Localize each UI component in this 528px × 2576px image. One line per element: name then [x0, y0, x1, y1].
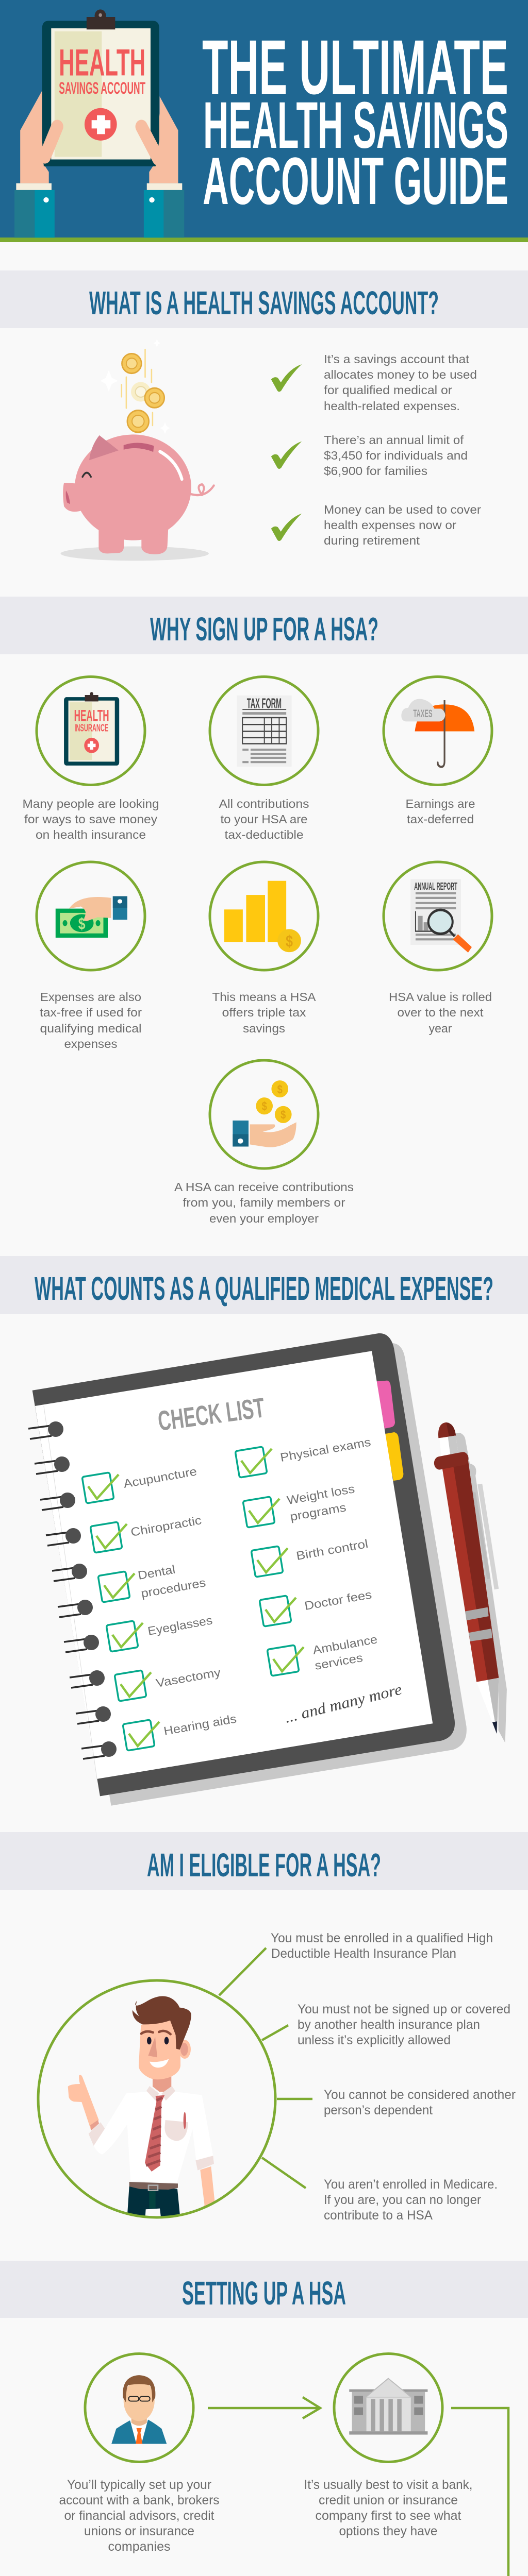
text blocks: eligibility rules: unless it’s explicitly allowed — [298, 2033, 451, 2047]
icon: bar stacks with coin — [224, 881, 301, 952]
icon: hand receiving coins: $ — [277, 1083, 283, 1096]
text blocks: benefit captions: to your HSA are — [221, 812, 307, 826]
icon rings — [37, 677, 492, 1168]
text blocks: eligibility rules: person’s dependent — [324, 2103, 433, 2117]
checklist text — [122, 1392, 404, 1738]
text blocks: benefit captions: even your employer — [209, 1212, 319, 1225]
text blocks: benefit captions — [23, 797, 492, 1225]
text blocks: benefit captions: Earnings are — [405, 797, 475, 810]
text block: definition points: health-related expenses. — [324, 399, 460, 413]
section: am I eligible — [0, 1832, 528, 2223]
notebook checklist illustration — [28, 1333, 507, 1806]
text blocks: benefit captions: tax-deductible — [225, 828, 303, 841]
checklist text: services — [314, 1651, 364, 1672]
checklist text: Acupuncture — [122, 1464, 198, 1490]
text block: definition points: allocates money to be used — [324, 368, 477, 381]
checklist text: CHECK LIST — [156, 1392, 267, 1437]
icon: annual report with magnifier — [410, 879, 472, 953]
text block: definition points: It’s a savings account that — [324, 352, 470, 366]
checklist text: ... and many more — [283, 1681, 404, 1726]
checklist text: Weight loss — [286, 1482, 356, 1507]
icon: bar stacks with coin: $ — [286, 933, 293, 951]
text blocks: eligibility rules: You must be enrolled in a qualified High — [271, 1931, 493, 1945]
icon: bank — [349, 2379, 427, 2435]
icon: health insurance clipboard: HEALTH — [74, 707, 109, 725]
text blocks: benefit captions: over to the next — [397, 1006, 484, 1019]
text blocks: setup steps: options they have — [339, 2524, 437, 2538]
icon: hand with banknote: $ — [78, 915, 86, 933]
section: what is a health savings account — [0, 270, 528, 561]
text blocks: eligibility rules: You cannot be considered another — [324, 2088, 516, 2102]
icon: hand receiving coins: $ — [280, 1109, 286, 1122]
text blocks: benefit captions: for ways to save money — [24, 812, 158, 826]
heading: SETTING UP A HSA — [182, 2275, 346, 2312]
text blocks: benefit captions: Expenses are also — [40, 990, 141, 1004]
text blocks: benefit captions: tax-free if used for — [40, 1006, 142, 1019]
checklist text: Physical exams — [279, 1435, 372, 1464]
text blocks: benefit captions: savings — [243, 1022, 285, 1035]
text blocks: eligibility rules: Deductible Health Insurance Plan — [271, 1946, 456, 1961]
text blocks: eligibility rules: by another health insurance plan — [298, 2018, 480, 2032]
text blocks: benefit captions: All contributions — [219, 797, 309, 810]
title — [202, 24, 508, 218]
text blocks: eligibility rules: You aren’t enrolled in Medicare. — [324, 2177, 498, 2192]
icon: hand receiving coins: $ — [262, 1100, 267, 1113]
text blocks: eligibility rules — [271, 1931, 516, 2223]
text blocks: setup steps: account with a bank, brokers — [59, 2493, 220, 2507]
icon: tax form — [237, 696, 292, 767]
notebook body — [32, 1333, 467, 1806]
spiral rings — [28, 1421, 117, 1759]
text blocks: setup steps: companies — [108, 2539, 170, 2554]
icon: umbrella and taxes cloud: TAXES — [413, 707, 433, 720]
checklist text: Vasectomy — [155, 1665, 222, 1690]
illustration: businessman in circle — [38, 1948, 312, 2217]
text blocks: setup steps: company first to see what — [316, 2509, 461, 2523]
icon: hands holding health savings account clipboard: SAVINGS ACCOUNT — [59, 79, 145, 97]
text blocks: benefit captions: on health insurance — [36, 828, 146, 841]
section: setting up a HSA — [0, 2261, 528, 2576]
checklist text: Eyeglasses — [146, 1613, 213, 1638]
text blocks: eligibility rules: If you are, you can no longer — [324, 2193, 481, 2207]
text blocks: benefit captions: tax-deferred — [407, 812, 474, 826]
icon: hand receiving coins — [233, 1080, 296, 1147]
checklist text: Ambulance — [311, 1632, 378, 1657]
icon: hand with banknote — [56, 896, 127, 938]
icon: health insurance clipboard: INSURANCE — [74, 722, 108, 734]
text block: definition points: $3,450 for individuals and — [324, 449, 468, 462]
text blocks: benefit captions: offers triple tax — [222, 1006, 306, 1019]
checklist text: Chiropractic — [129, 1513, 203, 1539]
icon: tax form: TAX FORM — [247, 696, 282, 711]
text blocks: eligibility rules: You must not be signed up or covered — [298, 2002, 510, 2016]
text blocks: setup steps: or financial advisors, credit — [64, 2509, 214, 2523]
text blocks: setup steps: It’s usually best to visit a bank, — [304, 2478, 472, 2492]
checklist text: Dental — [137, 1563, 176, 1582]
step rings — [85, 2353, 442, 2576]
check boxes — [82, 1447, 304, 1751]
icon: check marks — [271, 364, 302, 541]
text block: definition points: $6,900 for families — [324, 464, 427, 478]
icon: umbrella and taxes cloud — [401, 699, 474, 767]
text block: definition points: for qualified medical or — [324, 383, 452, 397]
text blocks: benefit captions: from you, family members or — [183, 1196, 345, 1209]
icon: pen — [438, 1422, 507, 1743]
checklist text: Hearing aids — [162, 1711, 238, 1738]
checklist text: procedures — [140, 1575, 207, 1600]
text block: definition points: health expenses now or — [324, 518, 456, 532]
arrows connecting steps — [207, 2397, 508, 2576]
text blocks: setup steps — [59, 2478, 472, 2576]
text blocks: benefit captions: HSA value is rolled — [389, 990, 492, 1004]
icon: annual report with magnifier: ANNUAL REPORT — [414, 880, 457, 892]
checklist text: Birth control — [295, 1537, 369, 1563]
section: qualified medical expense — [0, 1256, 528, 1806]
icon: adviser — [111, 2375, 167, 2444]
icon: hands holding health savings account clipboard: HEALTH — [59, 41, 145, 84]
text block: definition points: during retirement — [324, 534, 420, 547]
icon: hands holding health savings account clipboard — [14, 9, 184, 238]
icon: piggy bank with coins — [61, 339, 214, 561]
icons: seven benefit illustrations — [56, 692, 474, 1147]
text blocks: benefit captions: A HSA can receive contributions — [174, 1180, 354, 1194]
checklist text: Doctor fees — [303, 1587, 373, 1613]
text block: definition points: There’s an annual limit of — [324, 433, 464, 447]
icon: health insurance clipboard — [64, 692, 119, 766]
text blocks: eligibility rules: contribute to a HSA — [324, 2208, 433, 2223]
text block: definition points: Money can be used to cover — [324, 503, 481, 516]
section: why sign up — [0, 597, 528, 1225]
text blocks: benefit captions: Many people are looking — [23, 797, 159, 810]
checklist text: programs — [289, 1500, 347, 1523]
text blocks: setup steps: unions or insurance — [84, 2524, 194, 2538]
text block: definition points — [324, 352, 481, 547]
text blocks: setup steps: You’ll typically set up your — [67, 2478, 211, 2492]
text blocks: benefit captions: year — [429, 1022, 452, 1035]
hero banner — [0, 0, 528, 242]
text blocks: benefit captions: qualifying medical — [40, 1022, 141, 1035]
text blocks: benefit captions: This means a HSA — [212, 990, 316, 1004]
text blocks: setup steps: credit union or insurance — [319, 2493, 458, 2507]
text blocks: benefit captions: expenses — [64, 1037, 118, 1050]
